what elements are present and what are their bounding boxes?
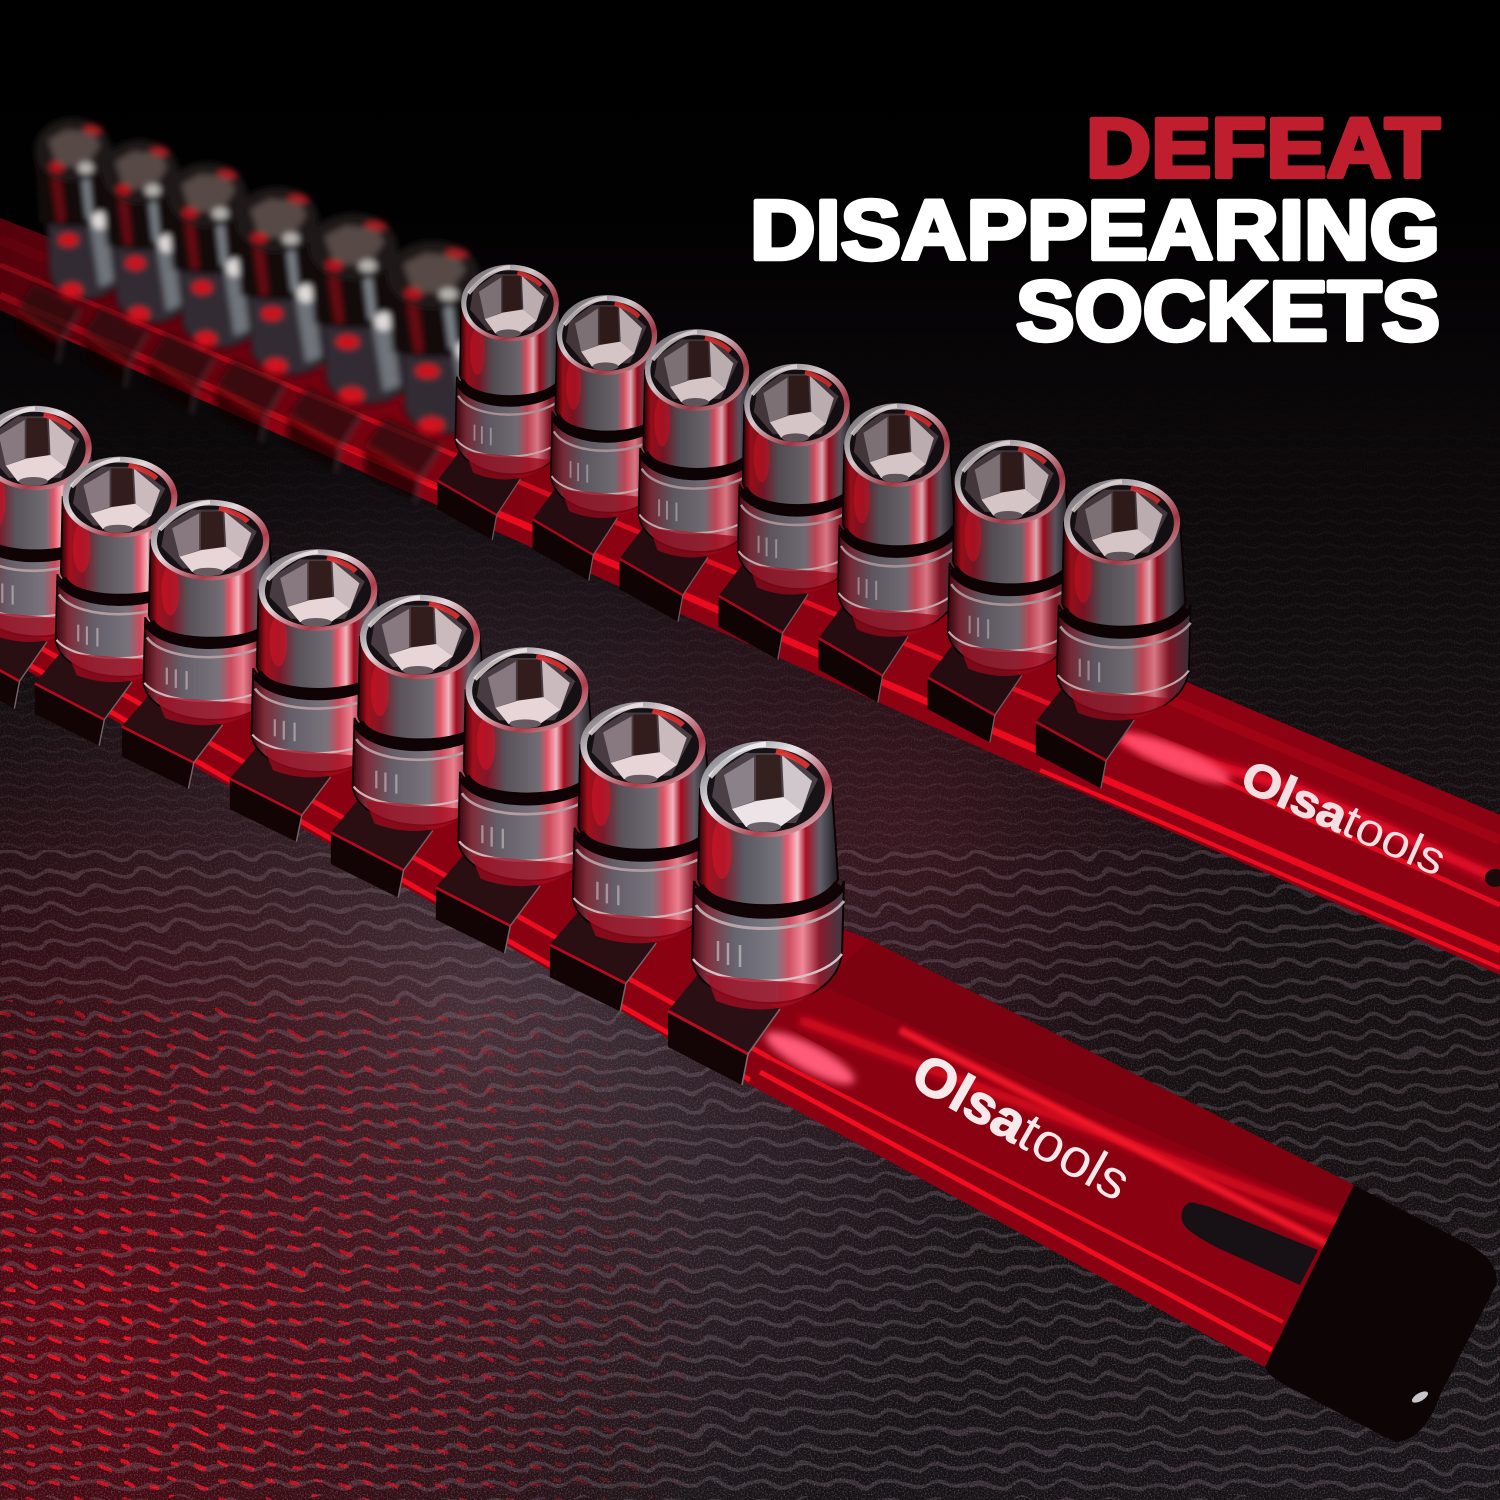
front rail sockets row <box>0 406 844 1085</box>
back rail: red aluminium bar <box>0 218 1500 975</box>
back rail sockets row <box>16 118 1191 788</box>
logo: front rail Olsatools: Olsatools <box>902 1042 1141 1213</box>
title: Defeat Disappearing Sockets <box>750 101 1440 358</box>
mid and near sockets <box>437 265 1191 788</box>
rail mounting slot <box>1182 1202 1318 1285</box>
title line 2: DISAPPEARING <box>750 183 1440 277</box>
front rail: red aluminium bar <box>0 590 1354 1367</box>
title line 1: DEFEAT <box>1086 101 1440 195</box>
logo: back rail Olsatools: Olsatools <box>1234 750 1454 886</box>
background: textured rubber mat <box>0 346 1500 1500</box>
far sockets, out of focus <box>16 118 492 503</box>
rubber end cap <box>1265 1185 1496 1442</box>
title line 3: SOCKETS <box>1016 264 1440 358</box>
